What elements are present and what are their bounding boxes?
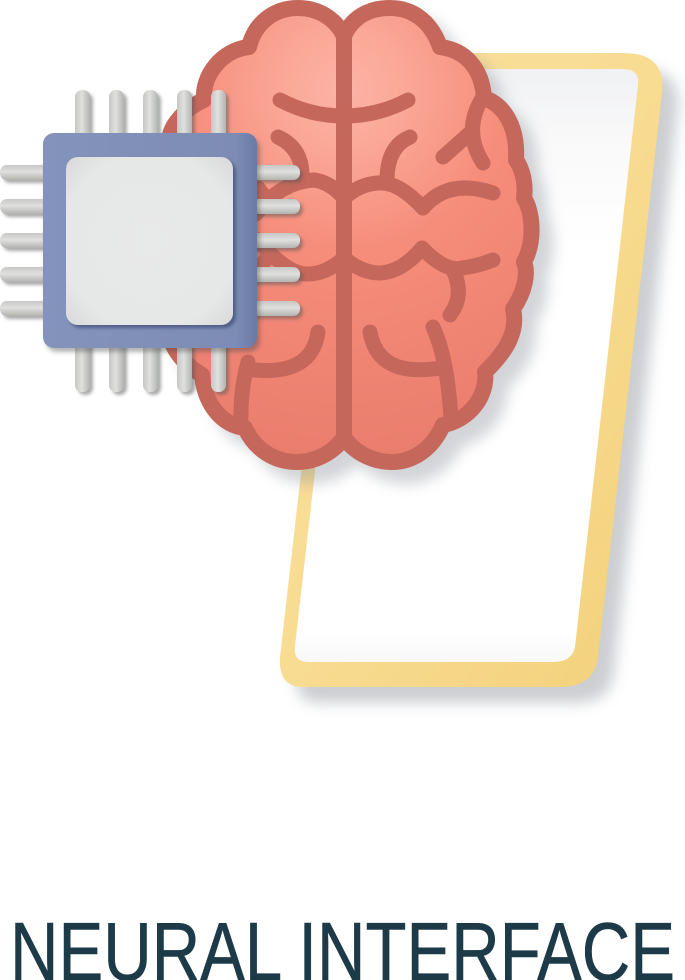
microchip — [0, 90, 300, 392]
chip inner panel — [66, 157, 233, 325]
chip body — [43, 133, 257, 348]
brain — [170, 8, 532, 462]
brain midline — [336, 36, 352, 440]
tablet device — [280, 53, 678, 703]
brain folds — [241, 97, 493, 425]
brain shadow — [184, 22, 546, 476]
chip pins — [0, 90, 300, 392]
